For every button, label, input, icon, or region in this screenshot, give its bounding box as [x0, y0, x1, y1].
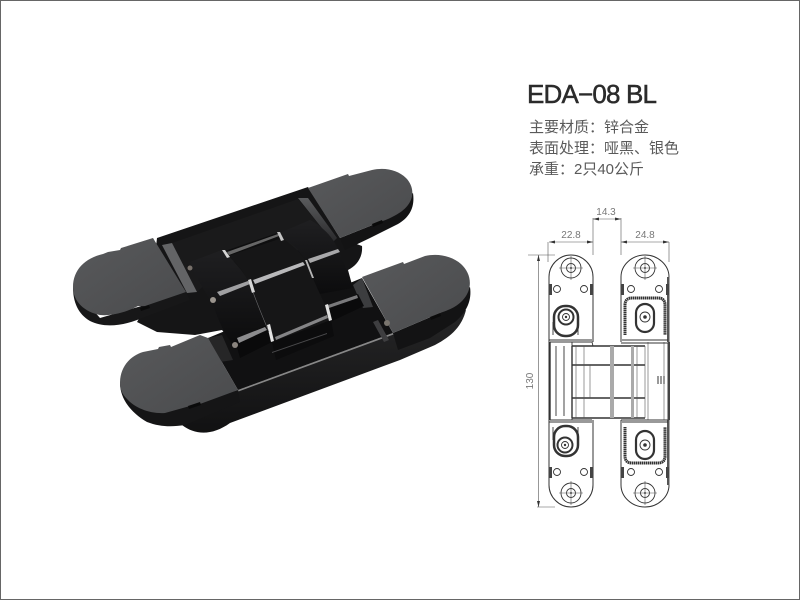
- center hinge mechanism: [550, 342, 670, 420]
- spec: load: 承重：2只40公斤: [529, 161, 644, 178]
- back leaf: left cap plate: [73, 238, 197, 325]
- title: EDA−08 BL: [527, 79, 657, 109]
- label 24.8: 24.8: [635, 230, 655, 241]
- white dividers: [222, 250, 230, 258]
- front leaf: right cap plate: [362, 255, 470, 350]
- label 22.8: 22.8: [561, 230, 581, 241]
- spec: material: 主要材质：锌合金: [529, 119, 649, 136]
- left leaf outline: [549, 255, 593, 507]
- screw heads: [188, 266, 192, 270]
- front leaf body: [163, 278, 466, 433]
- front leaf: left cap plate: [120, 335, 240, 426]
- label 130: 130: [525, 372, 536, 389]
- product photo: concealed hinge: [73, 169, 470, 433]
- dimension lines: [525, 207, 669, 507]
- hinge knuckles: [188, 220, 364, 360]
- highlights: [217, 281, 250, 296]
- label 14.3: 14.3: [596, 207, 616, 218]
- technical drawing: [525, 207, 670, 507]
- back leaf body: [137, 187, 362, 352]
- spec: finish: 表面处理：哑黑、银色: [529, 140, 679, 157]
- right leaf outline: [621, 255, 670, 507]
- back leaf: right cap plate: [298, 169, 413, 250]
- specification text: [529, 119, 679, 178]
